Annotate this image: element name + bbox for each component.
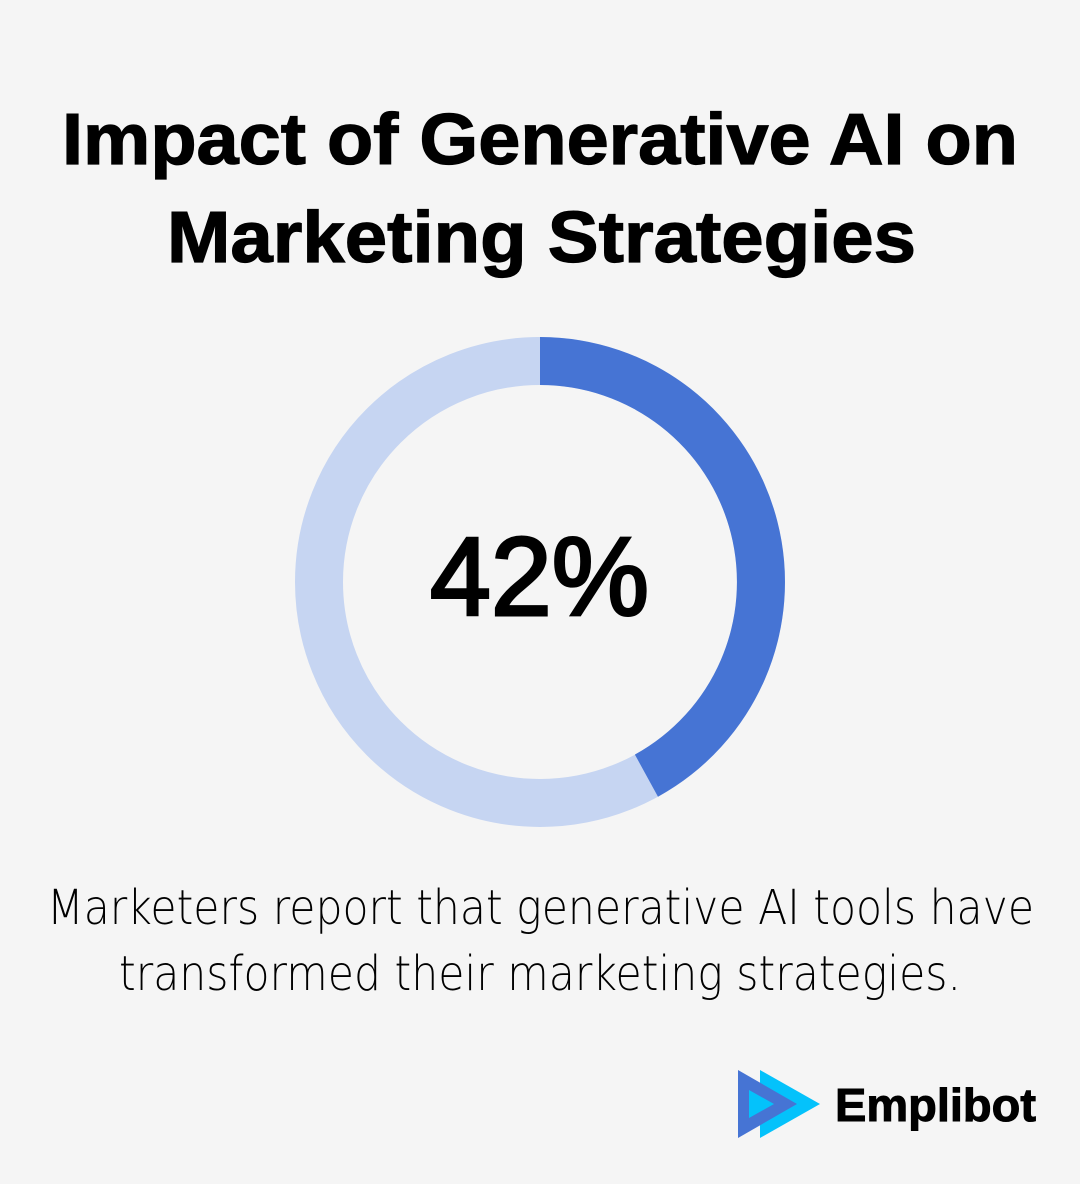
title [62,100,1018,278]
description text [47,880,1034,1002]
value: 42%: 42% [430,515,649,639]
donut chart: 42% [319,337,785,803]
logo: Emplibot [738,1070,1036,1138]
title: Marketing Strategies [167,198,916,278]
logo wordmark: Emplibot [835,1079,1036,1131]
icon: play triangles [738,1070,820,1138]
title: Impact of Generative AI on [62,100,1018,180]
description text: transformed their marketing strategies. [119,946,961,1002]
